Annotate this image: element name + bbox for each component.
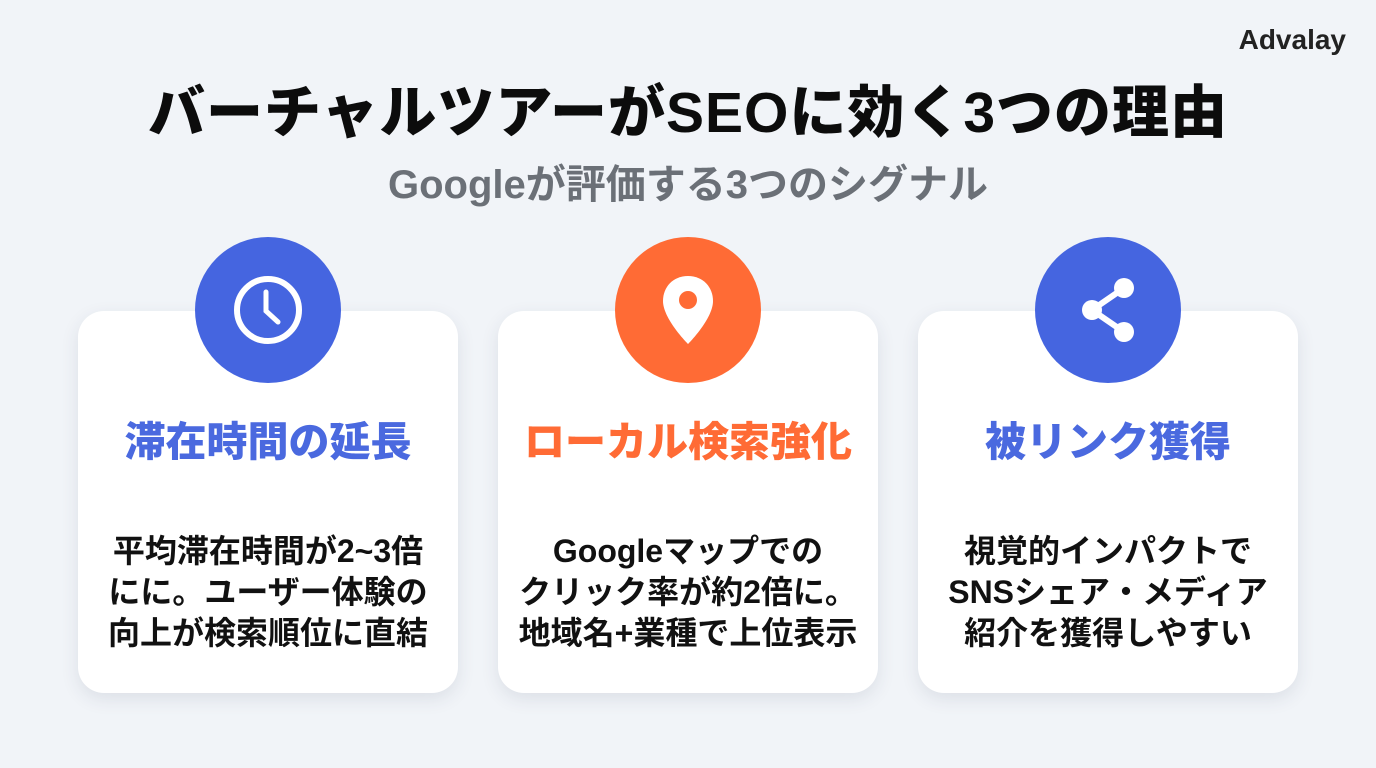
text: backlinks: 視覚的インパクトで: [964, 533, 1252, 569]
heading: dwell time: 滞在時間の延長: [124, 419, 412, 465]
text: dwell time: 向上が検索順位に直結: [108, 615, 428, 651]
text: backlinks: [948, 533, 1268, 651]
text: local search: Googleマップでの: [553, 533, 823, 569]
heading: local search: ローカル検索強化: [524, 419, 852, 465]
text: local search: クリック率が約2倍に。: [519, 574, 857, 610]
icon: clock: [195, 237, 341, 383]
text: dwell time: [108, 533, 428, 651]
panel: local search: [498, 311, 878, 693]
heading: backlinks: 被リンク獲得: [985, 419, 1231, 465]
title: バーチャルツアーがSEOに効く3つの理由: [148, 81, 1228, 145]
text: local search: 地域名+業種で上位表示: [519, 615, 857, 651]
panel: backlinks: [918, 311, 1298, 693]
subtitle: Googleが評価する3つのシグナル: [388, 163, 988, 207]
text: dwell time: 平均滞在時間が2~3倍: [113, 533, 423, 569]
panel: dwell time: [78, 311, 458, 693]
icon: share: [1035, 237, 1181, 383]
text: backlinks: 紹介を獲得しやすい: [964, 615, 1252, 651]
icon: map pin: [615, 237, 761, 383]
logo: Advalay: [1239, 24, 1346, 55]
text: local search: [519, 533, 857, 651]
text: backlinks: SNSシェア・メディア: [948, 574, 1268, 610]
text: dwell time: にに。ユーザー体験の: [108, 574, 428, 610]
